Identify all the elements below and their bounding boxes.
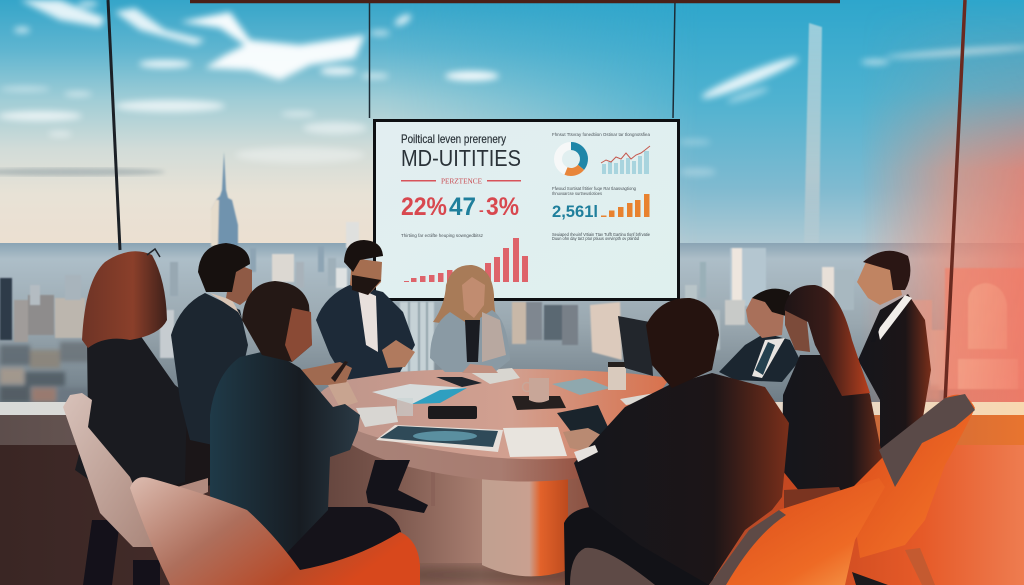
wall below window xyxy=(0,415,1024,445)
screen key figures: 22% xyxy=(401,193,447,221)
round table xyxy=(317,369,670,482)
donut chart xyxy=(558,146,584,172)
long hair xyxy=(784,285,870,396)
screen subtitle with rules xyxy=(401,178,521,186)
screen caption left: Thirtiing far ectiifte heuping sowngedbitsz xyxy=(401,233,484,238)
hair xyxy=(752,289,790,316)
front left orange chair xyxy=(130,477,420,585)
right grey and orange chair xyxy=(850,394,975,585)
dark chair behind left group xyxy=(150,425,215,510)
city skyline xyxy=(0,152,1024,403)
screen caption lower right: Seuiaped rheuinf Vrtiain Ttav Tufft Gartinu tlonf brfrvatie xyxy=(552,232,650,237)
black phone stack xyxy=(428,406,477,419)
tablet flat xyxy=(552,378,611,395)
clouds xyxy=(0,0,1024,176)
hand on tablet xyxy=(563,428,610,452)
screen key figures: 3% xyxy=(486,193,519,221)
floor shadow under table xyxy=(400,565,600,585)
line and column chart xyxy=(601,146,650,174)
face xyxy=(350,258,382,295)
table pedestal xyxy=(482,470,568,576)
person: bearded man in navy suit xyxy=(316,240,428,513)
sky background xyxy=(0,0,1024,250)
dark tablet xyxy=(557,405,612,441)
screen caption middle right xyxy=(552,186,637,196)
screen subtitle with rules: PERZTENCE xyxy=(441,178,482,186)
red bar chart xyxy=(404,238,528,282)
table leg xyxy=(431,470,435,506)
stationery xyxy=(620,393,655,405)
screen caption top right: Fhnsut Ttsvray fonedtiion Ostinar tar tlongnotsfiea xyxy=(552,132,650,137)
open laptop xyxy=(618,316,653,376)
paper cup xyxy=(608,362,626,390)
head xyxy=(646,298,719,388)
seat behind front right chair xyxy=(784,487,845,515)
face xyxy=(785,300,810,352)
hair xyxy=(863,251,910,290)
face xyxy=(226,262,252,305)
distant buildings xyxy=(0,222,948,390)
face xyxy=(462,277,485,318)
blue folder xyxy=(372,384,467,404)
auburn hair xyxy=(82,251,167,348)
person: bald man front left xyxy=(210,281,402,585)
open magazine xyxy=(376,425,503,452)
person: woman in grey blazer xyxy=(430,265,510,373)
lower city mottling xyxy=(0,340,940,402)
screen key figures xyxy=(401,193,519,221)
round-top tower xyxy=(945,283,1024,403)
face xyxy=(746,298,785,338)
front right orange chair xyxy=(570,478,885,585)
person: man in dark suit xyxy=(171,243,252,447)
trousers xyxy=(564,507,720,585)
blonde hair xyxy=(433,265,498,325)
notebook xyxy=(436,377,482,387)
face xyxy=(857,262,902,305)
person: woman with long hair, right xyxy=(782,285,889,492)
glass xyxy=(397,398,413,416)
coffee mug on notebook xyxy=(512,378,566,410)
person: man front right, from behind xyxy=(563,298,789,585)
person: standing man xyxy=(857,251,931,450)
person: woman in black, auburn hair xyxy=(75,249,188,585)
screen caption middle right: Ihnuvoarcse surtneuslotioes xyxy=(552,191,602,196)
glasses on head xyxy=(147,249,160,257)
light streak in sky xyxy=(804,23,822,245)
papers xyxy=(503,427,567,457)
head xyxy=(242,281,312,362)
person: man at right of table xyxy=(719,289,800,382)
orange bar chart xyxy=(601,194,650,217)
blazer xyxy=(430,310,510,372)
screen key figures: - xyxy=(479,202,484,218)
hand xyxy=(382,340,415,368)
grey cloud bank xyxy=(0,168,165,176)
screen heading: Poiltical leven prerenery xyxy=(401,132,506,146)
screen caption middle right: Ffwoud Sortisat frtitier fuqe Rar tlaasvagtiong xyxy=(552,186,637,191)
floor xyxy=(0,445,1024,585)
jacket xyxy=(210,350,360,560)
jacket xyxy=(574,373,789,585)
screen figure: 2,561l xyxy=(552,202,598,221)
items on table xyxy=(356,316,655,457)
warm city on right xyxy=(945,268,1024,403)
hair xyxy=(344,240,383,272)
presentation screen xyxy=(373,119,680,301)
papers at back xyxy=(470,368,520,384)
arm and phone hand xyxy=(300,362,352,385)
landmark tower xyxy=(211,152,238,246)
screen caption lower right xyxy=(552,232,650,241)
screen caption lower right: Duun ohn day tarz ptur ptiuus ovrvinpth ov ptiinbd xyxy=(552,236,639,241)
warm light wash on right windows xyxy=(870,23,1024,402)
legs and shoes xyxy=(366,460,428,513)
hair xyxy=(198,243,250,292)
screen title: MD-UITITIES xyxy=(401,145,521,171)
trousers xyxy=(250,507,402,585)
window frames xyxy=(108,0,965,403)
papers under hand xyxy=(356,406,398,427)
screen key figures: 47 xyxy=(449,193,476,221)
left white chair xyxy=(63,393,160,547)
window sill xyxy=(0,402,1024,415)
